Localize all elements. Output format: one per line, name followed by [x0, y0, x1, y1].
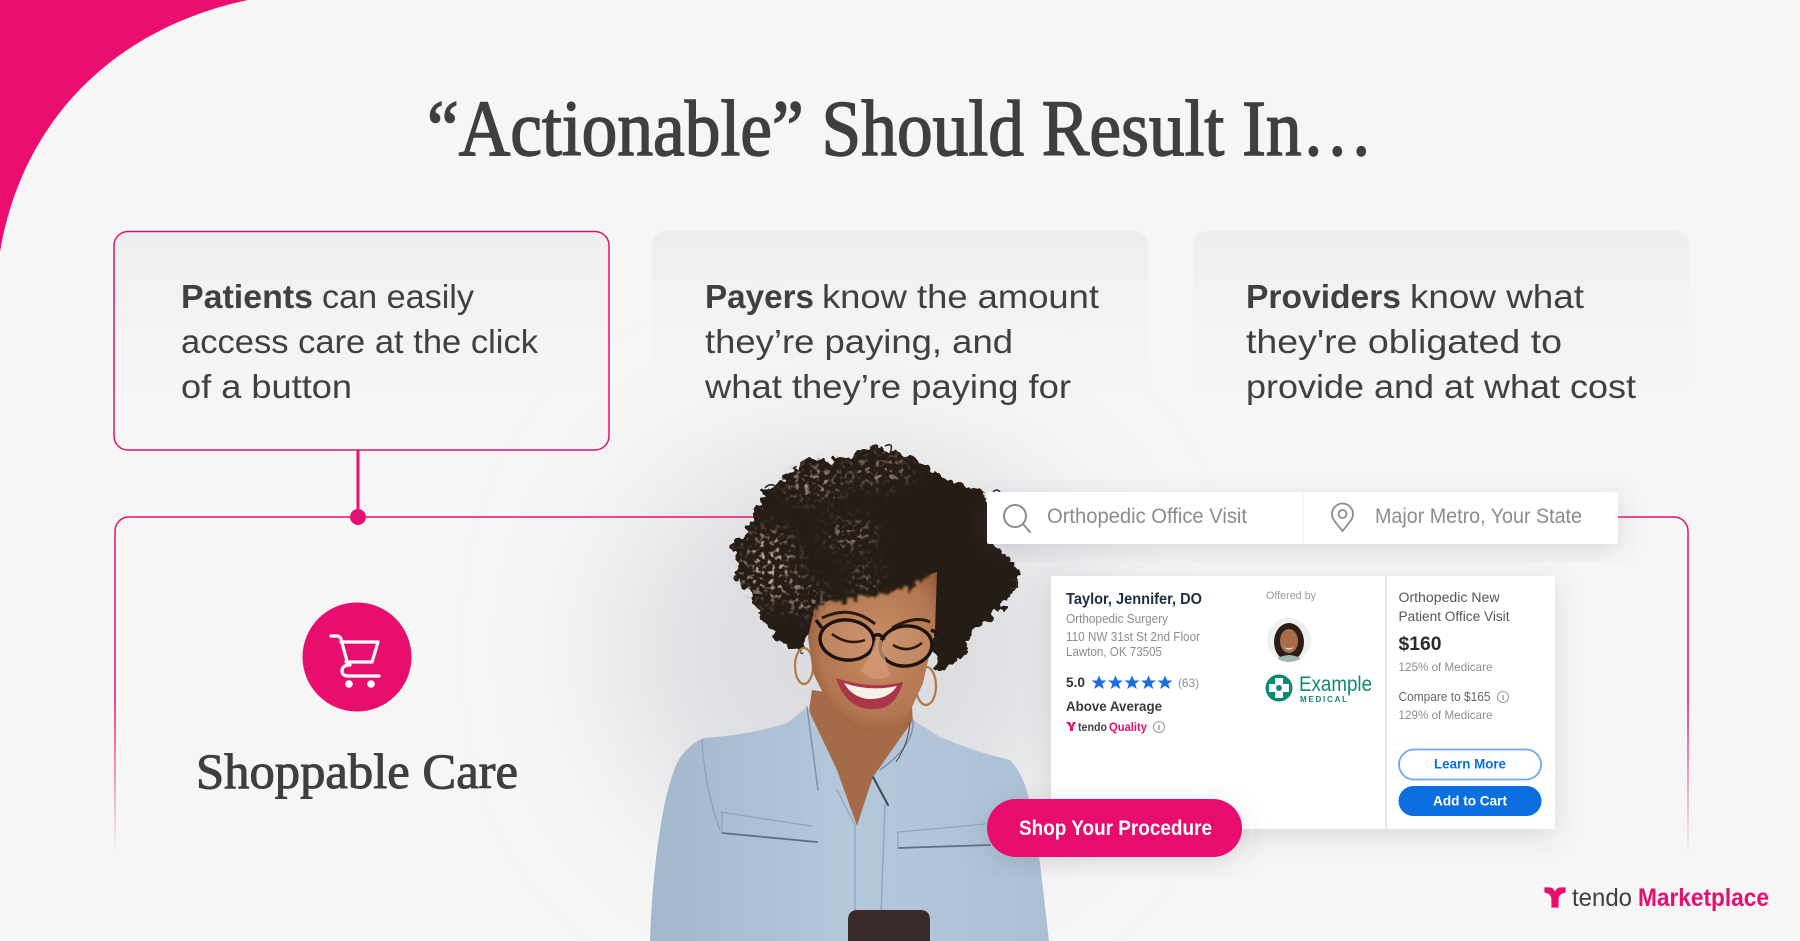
panel: providers: provide and at what cost [1246, 368, 1636, 405]
provider details: Orthopedic Surgery [1066, 612, 1169, 626]
tendo marketplace logo: Marketplace [1638, 884, 1769, 912]
panel: providers: know what [1410, 278, 1584, 315]
provider details: Taylor, Jennifer, DO [1066, 591, 1202, 608]
provider details: Above Average [1066, 698, 1162, 714]
hair curls [765, 445, 1017, 589]
panel: patients [114, 232, 609, 450]
nose shadow [860, 640, 890, 679]
panel: payers [652, 231, 1148, 450]
panel: providers: Providers [1246, 278, 1401, 315]
learn more button: Learn More [1434, 756, 1506, 772]
provider details [1066, 591, 1202, 714]
icon: shopping cart [302, 602, 412, 712]
hair highlights [742, 458, 908, 612]
neck and chest [809, 690, 913, 826]
shirt details [702, 707, 990, 941]
smile [836, 678, 903, 709]
shop your procedure button: Shop Your Procedure [1019, 817, 1212, 840]
tendo quality badge: Quality [1109, 720, 1147, 734]
heading: shoppable care: Shoppable Care [196, 743, 518, 799]
shirt [650, 707, 1049, 941]
price column: Orthopedic New [1398, 590, 1500, 605]
tendo quality badge [1066, 720, 1164, 734]
rating stars [1091, 676, 1172, 689]
hair back [733, 446, 1017, 673]
icon: magnifier [1004, 505, 1030, 532]
face [808, 572, 937, 733]
necklace [896, 722, 910, 762]
connector line with dot [350, 450, 366, 525]
search term: Orthopedic Office Visit [1047, 505, 1247, 528]
price column: 129% of Medicare [1398, 708, 1493, 722]
panel: providers [1193, 231, 1689, 450]
phone [848, 910, 930, 941]
panel: patients: Patients [181, 278, 313, 315]
provider details: Lawton, OK 73505 [1066, 645, 1162, 659]
shop your procedure button [987, 799, 1242, 857]
provider details: 5.0 [1066, 674, 1085, 690]
panel: patients: can easily [322, 278, 475, 315]
price column [1398, 590, 1510, 722]
example medical logo: Example [1299, 673, 1372, 696]
provider result card [1051, 576, 1555, 829]
icon: location pin [1332, 504, 1353, 531]
tendo quality badge: tendo [1078, 720, 1107, 734]
soft grey glow behind person [620, 440, 1080, 860]
person with phone [650, 445, 1049, 941]
example medical logo [1266, 673, 1372, 704]
provider details: 110 NW 31st St 2nd Floor [1066, 630, 1200, 644]
title: “Actionable” Should Result In… [427, 86, 1373, 173]
tendo marketplace logo: tendo [1572, 884, 1632, 912]
glasses [816, 617, 938, 669]
teeth [844, 683, 897, 699]
panel: payers: what they’re paying for [704, 368, 1071, 405]
provider details: (63) [1178, 676, 1199, 690]
panel: payers: Payers [705, 278, 814, 315]
learn more button [1399, 750, 1541, 780]
doctor avatar [1267, 618, 1311, 666]
example medical logo: MEDICAL [1300, 695, 1347, 704]
shoppable care frame [115, 517, 1688, 855]
pink corner shape [0, 0, 248, 252]
tendo marketplace logo [1545, 884, 1769, 912]
earrings [795, 648, 936, 705]
closed eyes [832, 634, 922, 649]
price column: Compare to $165 [1398, 690, 1491, 704]
price column: $160 [1398, 634, 1442, 655]
price column: Patient Office Visit [1398, 609, 1510, 624]
panel: payers: they’re paying, and [705, 323, 1013, 360]
location term: Major Metro, Your State [1375, 505, 1582, 528]
panel: patients: of a button [181, 368, 352, 405]
add to cart button [1398, 786, 1542, 816]
price column: 125% of Medicare [1398, 660, 1493, 674]
fringe [813, 500, 960, 618]
add to cart button: Add to Cart [1433, 794, 1507, 808]
panel: payers: know the amount [822, 278, 1099, 315]
panel: patients: access care at the click [181, 323, 539, 360]
search bar [987, 492, 1618, 544]
panel: providers: they're obligated to [1246, 323, 1562, 360]
offered by: Offered by [1266, 590, 1316, 602]
eyebrows [822, 612, 930, 628]
